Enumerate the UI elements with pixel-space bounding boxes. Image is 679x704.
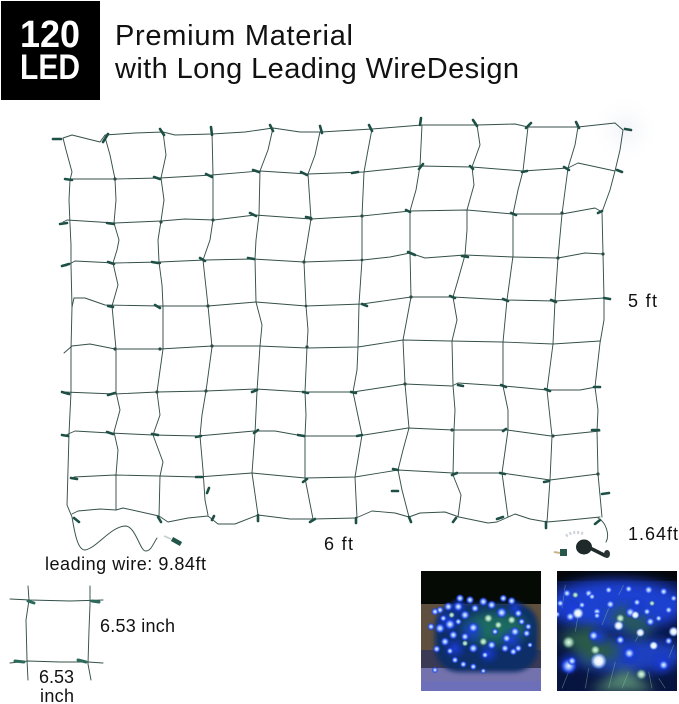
badge: 120 LED (1, 1, 100, 100)
label: horizontal spacing: 6.53 inch (100, 616, 175, 636)
title: Premium Material (115, 20, 353, 52)
label: vertical spacing: 6.53 (39, 667, 74, 687)
net horizontal wires (63, 123, 623, 524)
net bulbs (53, 118, 631, 528)
label: vertical spacing (39, 667, 74, 704)
photo: lit grass (547, 571, 679, 691)
badge: 120 LED: 120 (20, 14, 80, 56)
photo: lit hedge (421, 571, 541, 691)
inset: single grid square (10, 586, 103, 680)
badge: 120 LED: LED (20, 48, 80, 87)
label: 1.64 ft: 1.64ft (628, 524, 678, 544)
label: 6 ft: 6 ft (324, 534, 353, 554)
leading wire with plug (72, 517, 181, 551)
title (114, 20, 519, 85)
net knots (113, 177, 605, 476)
coiled lead and plug (554, 518, 610, 558)
label: leading wire: leading wire: 9.84ft (45, 554, 206, 574)
net vertical wires (63, 125, 623, 522)
label: 5 ft: 5 ft (628, 291, 657, 311)
light net diagram (53, 118, 631, 528)
title: with Long Leading WireDesign (114, 53, 519, 85)
